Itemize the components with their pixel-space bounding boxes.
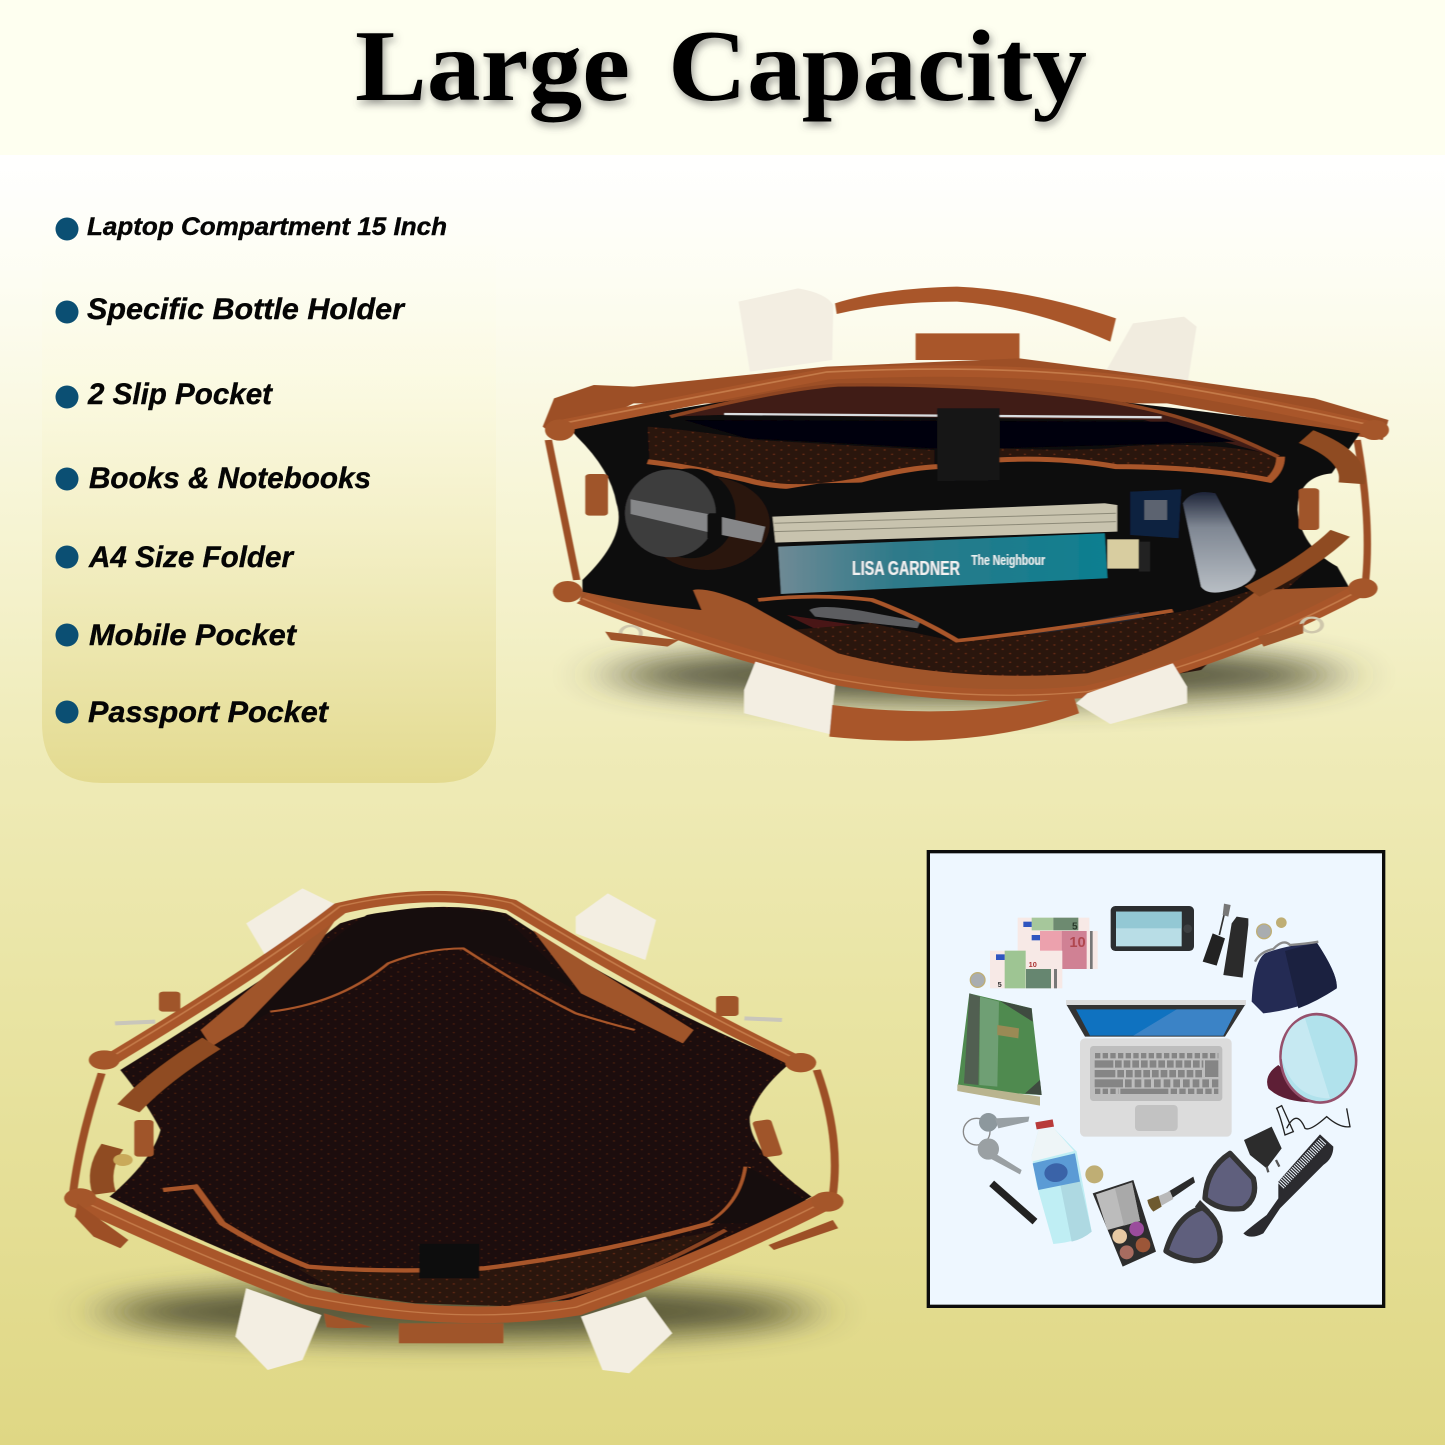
icon: mascara	[1203, 904, 1248, 978]
bottom handle tabs	[236, 1288, 672, 1373]
interior lining	[110, 907, 811, 1301]
lower pocket	[163, 1167, 806, 1307]
front pocket lip	[758, 597, 1173, 641]
feature: bottle holder: Specific Bottle Holder	[87, 293, 406, 326]
icon: banknotes: 10	[1029, 960, 1037, 969]
bag shadow	[611, 647, 1337, 703]
feature: mobile pocket: Mobile Pocket	[89, 619, 298, 652]
framed background	[928, 852, 1384, 1306]
top handle tabs	[246, 888, 656, 960]
zipper tape	[102, 1043, 211, 1193]
back handle	[739, 287, 1197, 387]
icon: mirror	[1267, 1009, 1362, 1107]
panel: feature list	[42, 213, 496, 783]
side straps	[73, 1070, 835, 1195]
bottom rim	[582, 590, 1360, 695]
black notebook	[770, 478, 1114, 518]
knobs and fittings	[64, 992, 844, 1250]
panel: bag contents illustration	[928, 852, 1384, 1306]
icon: book	[957, 993, 1042, 1106]
title: Capacity	[668, 10, 1087, 123]
interior	[571, 386, 1360, 686]
icon: laptop	[1066, 1000, 1246, 1137]
icon: sunglasses	[1166, 1153, 1255, 1261]
title: Large	[355, 10, 630, 123]
title band	[0, 0, 1445, 155]
icon: makeup brush	[1147, 1177, 1195, 1212]
bottom handle	[744, 662, 1187, 741]
top rim	[104, 895, 801, 1063]
icon: smartphone	[1111, 906, 1194, 951]
feature: A4 folder: A4 Size Folder	[88, 541, 295, 574]
blue book with title	[778, 533, 1107, 594]
icon: water bottle	[1032, 1119, 1092, 1244]
white-page book	[773, 503, 1117, 543]
side straps	[548, 440, 1367, 580]
icon: banknotes: 5	[998, 980, 1002, 989]
knobs, tabs and rings	[545, 419, 1389, 647]
icon: banknotes: 10	[1069, 935, 1086, 951]
icon: eyeliner pencil	[992, 1183, 1035, 1222]
photo: packed bag from above	[543, 287, 1389, 741]
elastic strap	[937, 408, 1000, 481]
icon: purse	[1252, 942, 1337, 1013]
top rim	[560, 369, 1366, 426]
blue book with title: LISA GARDNER	[852, 558, 960, 580]
icon: charger	[1244, 1106, 1350, 1172]
blue book with title: The Neighbour	[971, 552, 1045, 569]
icon: comb	[1243, 1134, 1333, 1237]
icon: banknotes	[990, 918, 1098, 989]
feature: slip pocket: 2 Slip Pocket	[87, 378, 274, 411]
grey spray bottle	[1183, 492, 1256, 593]
outer leather	[543, 358, 1388, 440]
feature: passport pocket: Passport Pocket	[88, 696, 330, 729]
bottom rim	[80, 1200, 827, 1315]
icon: keys	[963, 1113, 1029, 1174]
right zipper tape	[1252, 437, 1352, 592]
front pocket lining	[770, 563, 1315, 686]
back pocket lining and laptop	[648, 385, 1281, 487]
feature: books and notebooks: Books & Notebooks	[89, 462, 371, 495]
icon: eyeshadow palette	[1093, 1180, 1156, 1267]
phone and passport in front pocket	[787, 607, 1144, 640]
panel background	[42, 225, 496, 783]
bottle cap and strap	[625, 468, 770, 570]
photo: empty bag from above	[64, 888, 844, 1373]
icon: banknotes: 5	[1072, 922, 1078, 933]
front leather band	[580, 587, 1366, 697]
title	[355, 10, 1087, 123]
icon: coins	[970, 917, 1287, 1183]
small perfume box	[1107, 489, 1181, 572]
bag shadow	[104, 1283, 811, 1340]
top pocket panels	[201, 909, 694, 1047]
elastic strap	[419, 1244, 479, 1278]
feature: laptop compartment: Laptop Compartment 15 Inch	[87, 213, 447, 241]
